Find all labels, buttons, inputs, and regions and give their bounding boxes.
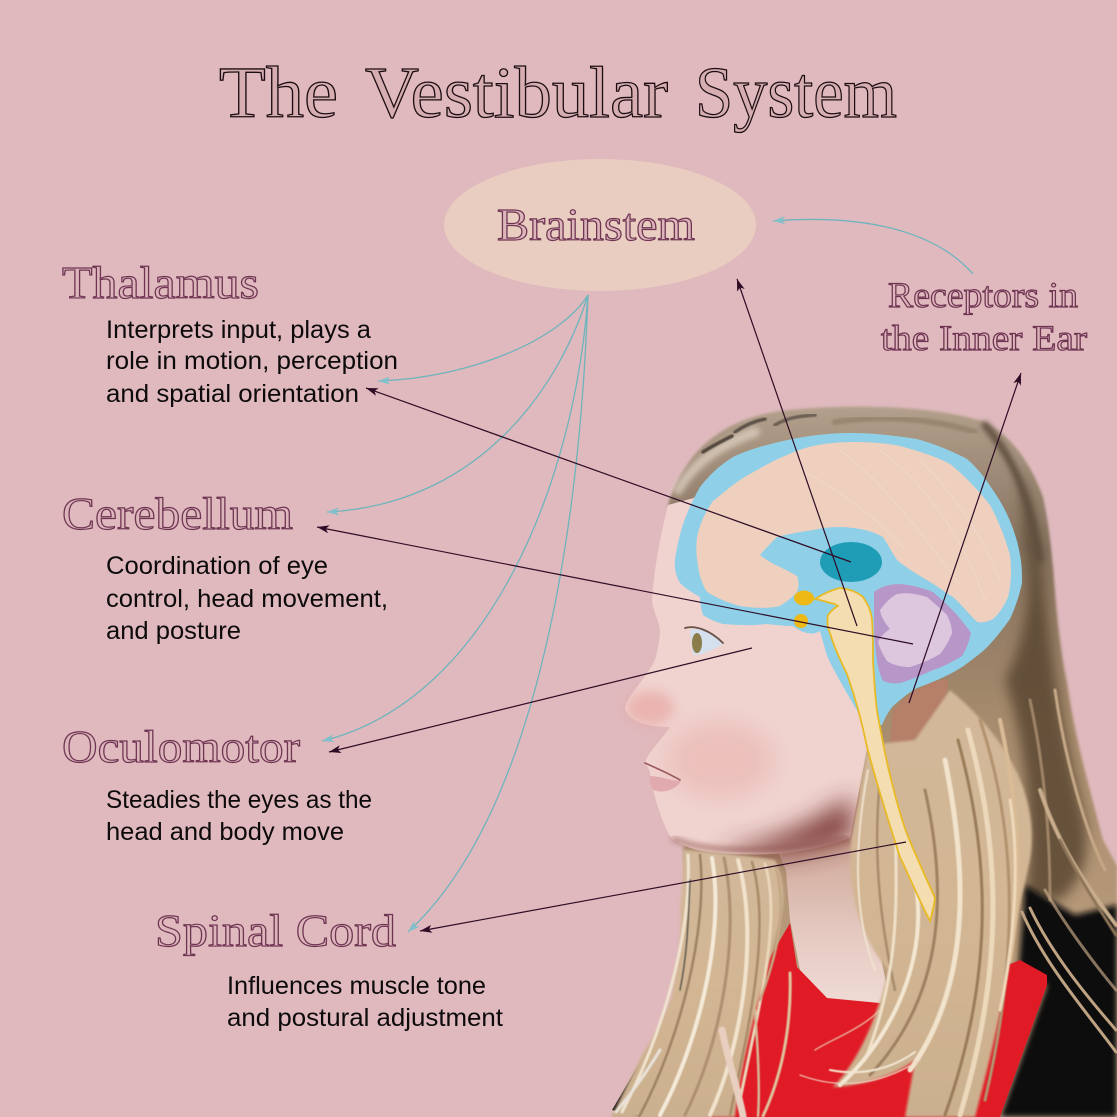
section: Spinal Cord: and postural adjustment	[227, 1004, 503, 1032]
section: Cerebellum	[62, 488, 388, 645]
section: Thalamus: Interprets input, plays a	[106, 316, 371, 344]
cerebrum	[696, 442, 1011, 622]
tan streaks over jacket	[1022, 890, 1116, 1052]
section: Oculomotor: Oculomotor	[62, 721, 300, 772]
section: Thalamus: and spatial orientation	[106, 380, 359, 408]
cerebrospinal fluid: blue outline	[675, 433, 1022, 728]
label: Brainstem: Brainstem	[497, 200, 695, 250]
oculomotor nucleus lower	[794, 614, 808, 628]
red shirt	[708, 923, 1047, 1117]
title: System	[695, 52, 897, 133]
title	[219, 52, 897, 133]
strands right	[800, 690, 1116, 1115]
section: Spinal Cord: Spinal Cord	[155, 905, 396, 956]
dark hair behind head	[1005, 470, 1087, 900]
jacket	[612, 885, 1117, 1117]
section: Oculomotor: Steadies the eyes as the	[106, 786, 372, 814]
arrow: receptors to brainstem	[773, 219, 973, 274]
front hair left	[612, 850, 783, 1117]
section: Cerebellum: and posture	[106, 617, 241, 645]
cerebellum inner	[878, 593, 952, 667]
brainstem ellipse	[444, 159, 756, 291]
section: Thalamus	[62, 257, 398, 408]
label: Receptors in the Inner Ear	[881, 275, 1087, 358]
nose blush	[626, 691, 674, 725]
hair top streaks	[678, 415, 1040, 560]
front hair right	[833, 690, 1032, 1117]
neck	[775, 790, 890, 1004]
cerebrum fibres	[800, 450, 1000, 600]
face	[625, 480, 890, 854]
arrow: spinal cord	[420, 842, 906, 931]
teal arrows from brainstem	[322, 219, 973, 932]
title: The	[219, 52, 338, 133]
arrow: brainstem to cerebellum	[327, 295, 588, 512]
dark arrows from diagram	[317, 279, 1021, 931]
oculomotor nucleus upper	[794, 590, 814, 606]
cerebellum	[874, 584, 971, 683]
cheek blush	[665, 722, 775, 798]
arrow: brainstem	[737, 279, 857, 626]
section: Cerebellum: control, head movement,	[106, 585, 388, 613]
lower lip	[650, 776, 681, 792]
section: Cerebellum: Cerebellum	[62, 488, 293, 539]
brainstem and spinal cord	[815, 588, 935, 921]
arrow: cerebellum	[317, 527, 913, 644]
jaw edge shadow	[672, 838, 850, 850]
mouth line	[645, 763, 680, 780]
eye	[685, 627, 724, 655]
photo: girl in profile	[612, 407, 1117, 1117]
arrow: brainstem to thalamus	[378, 295, 588, 381]
section: Oculomotor: head and body move	[106, 818, 344, 846]
thalamus	[820, 542, 882, 582]
section: Spinal Cord: Influences muscle tone	[227, 972, 486, 1000]
strands left	[616, 855, 790, 1116]
brain diagram	[675, 433, 1022, 921]
section: Oculomotor	[62, 721, 372, 846]
arrow: oculomotor	[329, 648, 752, 752]
section: Thalamus: role in motion, perception	[106, 347, 398, 375]
section: Thalamus: Thalamus	[62, 257, 259, 308]
under-jaw shadow	[725, 795, 852, 857]
arrow: thalamus	[366, 388, 851, 562]
arrow: brainstem to spinal cord	[408, 295, 588, 932]
label: Receptors in the Inner Ear: Receptors in	[888, 275, 1078, 315]
section: Cerebellum: Coordination of eye	[106, 552, 328, 580]
back hair	[612, 407, 1117, 1117]
ear	[890, 679, 948, 744]
title: Vestibular	[365, 52, 668, 133]
section: Spinal Cord	[155, 905, 503, 1032]
arrow: brainstem to oculomotor	[322, 295, 588, 741]
label: Receptors in the Inner Ear: the Inner Ear	[881, 318, 1087, 358]
arrow: inner ear	[909, 373, 1021, 703]
